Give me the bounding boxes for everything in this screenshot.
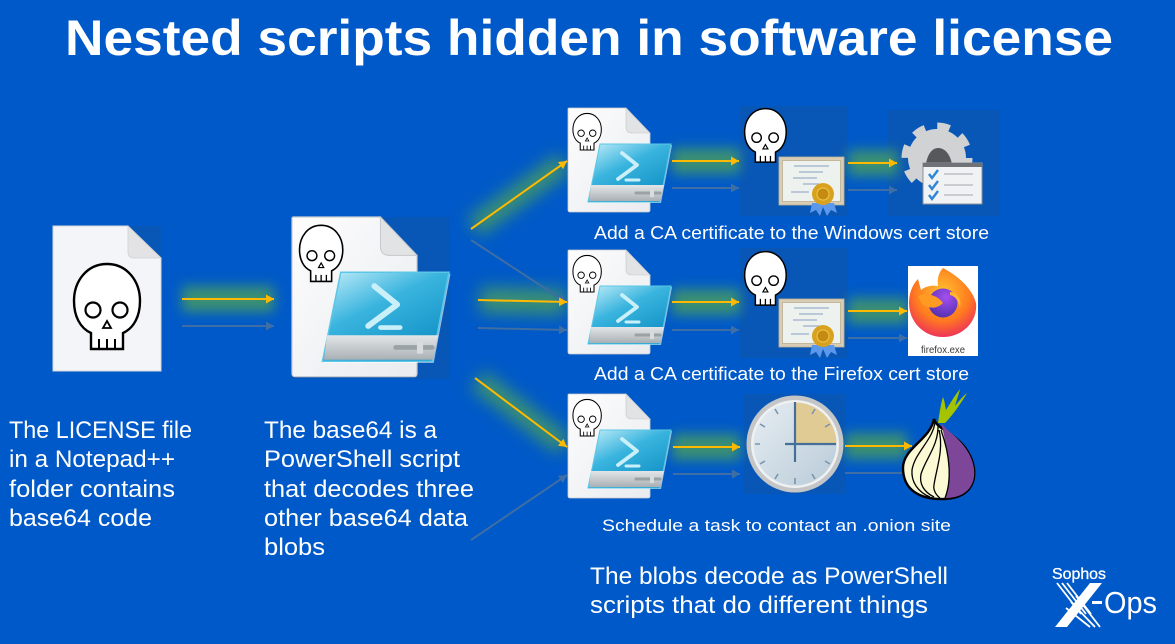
text block: blobs decode: The blobs decode as PowerShell xyxy=(590,563,948,590)
icon: script 1 xyxy=(568,108,672,212)
arrow: license to base64 script xyxy=(182,286,274,326)
icon: script 3 xyxy=(568,394,672,498)
text block: license file xyxy=(9,417,192,532)
arrow: certificate to Firefox xyxy=(848,311,907,338)
text block: base64 script xyxy=(264,417,474,561)
arrows: fan-out to three scripts xyxy=(471,161,567,540)
caption: Windows cert store: Add a CA certificate to the Windows cert store xyxy=(594,223,989,243)
text block: license file: base64 code xyxy=(9,505,152,532)
logo: Sophos X-Ops: Sophos xyxy=(1052,566,1106,583)
logo: Sophos X-Ops: Ops xyxy=(1104,585,1157,620)
arrow: script 2 to certificate xyxy=(672,302,739,330)
text block: blobs decode: scripts that do different things xyxy=(590,592,928,619)
icon: script 2 xyxy=(568,250,672,354)
text block: base64 script: The base64 is a xyxy=(264,417,438,444)
icon: scheduled task clock xyxy=(746,396,844,492)
text block: base64 script: that decodes three xyxy=(264,476,474,503)
icon: certificate with skull xyxy=(745,109,844,216)
arrow: clock to Tor xyxy=(845,446,912,473)
icon: certificate with skull xyxy=(745,252,844,358)
caption: scheduled task: Schedule a task to contact an .onion site xyxy=(602,516,951,535)
text block: base64 script: blobs xyxy=(264,534,325,561)
logo: Sophos X-Ops xyxy=(1052,566,1157,627)
caption: Firefox cert store: Add a CA certificate to the Firefox cert store xyxy=(594,364,969,384)
text block: blobs decode xyxy=(590,563,948,619)
text block: license file: folder contains xyxy=(9,476,175,503)
text block: base64 script: other base64 data xyxy=(264,505,469,532)
panel: Windows cert store chain xyxy=(568,106,1000,216)
icon: Windows cert store gear xyxy=(906,127,982,204)
text block: base64 script: PowerShell script xyxy=(264,446,460,473)
text block: license file: in a Notepad++ xyxy=(9,446,175,473)
icon: firefox.exe xyxy=(908,266,978,356)
panel: license file icon xyxy=(53,226,161,371)
icon: firefox.exe: firefox.exe xyxy=(921,345,965,356)
panel: Firefox cert store chain xyxy=(568,248,978,358)
icon: base64 PowerShell script xyxy=(292,217,450,379)
arrow: script 3 to clock xyxy=(673,447,740,474)
icon: Tor onion xyxy=(903,389,974,499)
arrow: certificate to cert store xyxy=(848,163,897,190)
arrow: script 1 to certificate xyxy=(672,161,739,188)
panel: Tor scheduled task chain xyxy=(568,389,974,499)
title: Nested scripts hidden in software license xyxy=(65,10,1113,66)
text block: license file: The LICENSE file xyxy=(9,417,192,444)
